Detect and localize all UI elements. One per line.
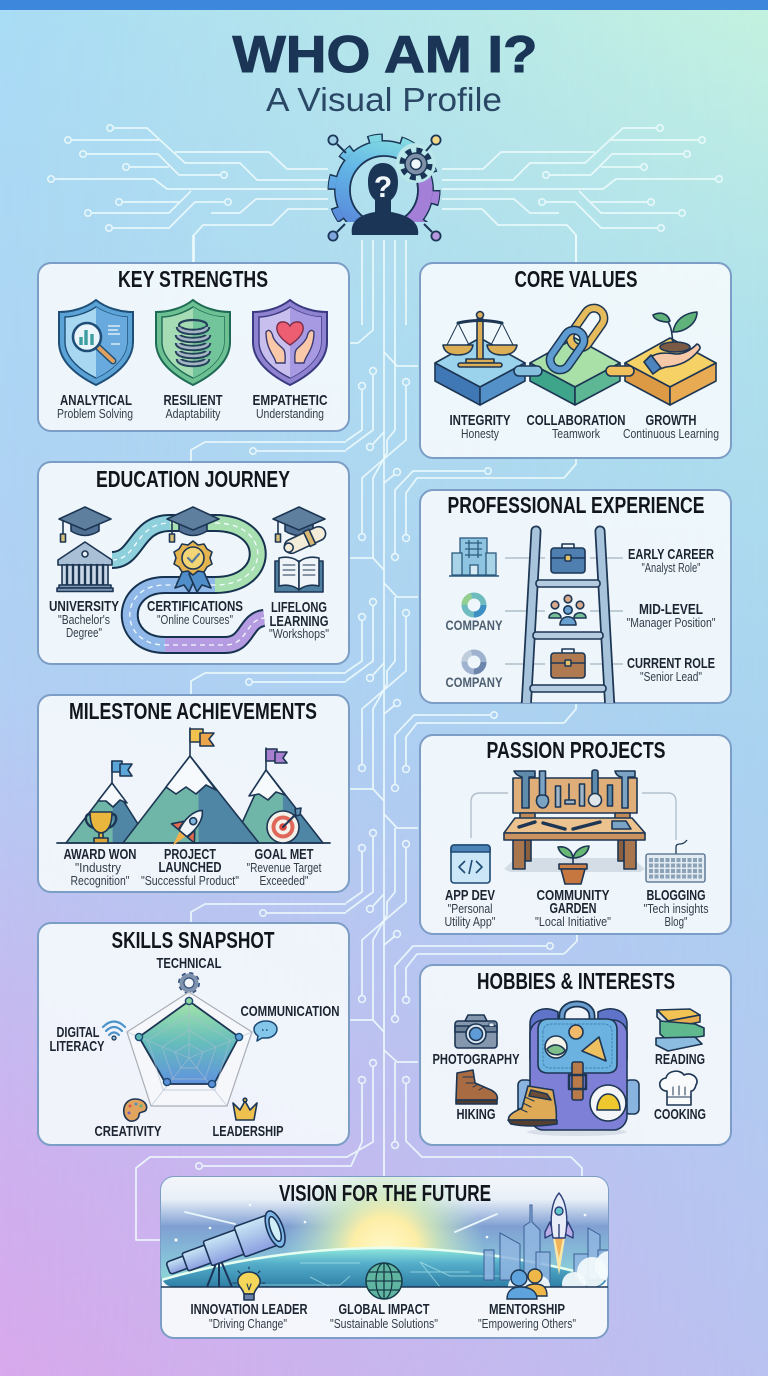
label: mentorship: "Empowering Others" <box>478 1316 576 1331</box>
label: early career: EARLY CAREER <box>628 546 714 563</box>
icon: scales <box>443 312 517 367</box>
icon: chain links <box>546 304 608 374</box>
label: early career <box>628 546 714 575</box>
icon: brown briefcase <box>551 649 585 678</box>
icon: hand with seedling <box>644 312 700 374</box>
label: university: "Bachelor's <box>58 612 110 627</box>
label: hiking: HIKING <box>456 1106 496 1123</box>
icon: target <box>267 808 301 843</box>
icon: books <box>656 1009 704 1051</box>
panel: hobbies and interests <box>420 965 731 1145</box>
label: digital literacy: LITERACY <box>50 1038 104 1055</box>
label: analytical <box>57 392 133 421</box>
icon: palette <box>124 1099 147 1121</box>
icon: globe <box>366 1263 402 1299</box>
icon: keyboard <box>646 840 705 882</box>
label: award won <box>64 846 136 888</box>
heading: key strengths: KEY STRENGTHS <box>118 266 268 292</box>
heading: passion projects: PASSION PROJECTS <box>486 737 666 763</box>
icon: potted plant <box>558 846 589 884</box>
label: integrity: INTEGRITY <box>450 412 510 429</box>
label: mid-level: MID-LEVEL <box>639 601 703 618</box>
label: leadership: LEADERSHIP <box>212 1123 284 1140</box>
label: integrity <box>450 412 510 441</box>
icon: gear <box>180 974 198 992</box>
icon: puzzle tiles <box>435 338 716 405</box>
illustration: horizon scene <box>161 1177 608 1286</box>
label: blogging: "Tech insights <box>644 901 709 916</box>
label: app dev <box>444 887 496 929</box>
label: project launched <box>141 846 239 888</box>
subtitle: A Visual Profile <box>266 81 502 118</box>
label: communication: COMMUNICATION <box>240 1003 340 1020</box>
label: current role: CURRENT ROLE <box>627 655 715 672</box>
icon: rocket <box>161 801 214 855</box>
label: resilient <box>164 392 222 421</box>
label: innovation leader: INNOVATION LEADER <box>190 1301 308 1318</box>
icon: hiking boot <box>456 1070 497 1104</box>
label: company 2: COMPANY <box>446 674 503 690</box>
panel: vision for the future <box>160 1176 609 1339</box>
label: growth: GROWTH <box>646 412 696 429</box>
label: reading: READING <box>655 1051 705 1068</box>
icon: chef hat <box>660 1071 697 1105</box>
label: mentorship: MENTORSHIP <box>489 1301 565 1318</box>
label: blogging: Blog" <box>664 914 688 929</box>
label: empathetic: Understanding <box>256 406 324 421</box>
label: mentorship <box>478 1301 576 1331</box>
label: early career: "Analyst Role" <box>642 560 701 575</box>
label: lifelong learning: LEARNING <box>270 613 328 630</box>
label: mid-level <box>626 601 716 630</box>
label: community garden: COMMUNITY <box>536 887 610 904</box>
label: creativity: CREATIVITY <box>94 1123 162 1140</box>
label: innovation leader <box>190 1301 308 1331</box>
icon: backpack <box>518 1004 639 1136</box>
label: university: Degree" <box>66 625 102 640</box>
icon: graduation cap 2 <box>167 507 219 542</box>
label: university: UNIVERSITY <box>49 598 119 615</box>
label: goal met: "Revenue Target <box>246 860 322 875</box>
icon: graduation cap 3 <box>273 507 325 542</box>
heading: hobbies and interests: HOBBIES & INTERESTS <box>477 968 675 994</box>
icon: yellow boot <box>508 1086 557 1126</box>
icon: lightbulb <box>233 1267 265 1300</box>
icon: wifi <box>103 1022 125 1040</box>
label: cooking: COOKING <box>654 1106 706 1123</box>
panel: education journey <box>38 462 349 664</box>
label: empathetic: EMPATHETIC <box>252 392 328 409</box>
label: certifications: CERTIFICATIONS <box>147 598 243 615</box>
icon: office building <box>449 538 499 576</box>
icon: certification badge <box>174 541 212 592</box>
panel: professional experience <box>420 490 731 710</box>
label: technical: TECHNICAL <box>156 955 222 972</box>
label: analytical: ANALYTICAL <box>60 392 132 409</box>
label: blogging <box>644 887 709 929</box>
label: project launched: "Successful Product" <box>141 873 239 888</box>
label: app dev: Utility App" <box>444 914 496 929</box>
label: certifications: "Online Courses" <box>157 612 233 627</box>
label: global impact <box>330 1301 438 1331</box>
icon: workbench <box>504 770 645 872</box>
label: lifelong learning: LIFELONG <box>271 599 327 616</box>
heading: skills snapshot: SKILLS SNAPSHOT <box>112 927 274 953</box>
label: resilient: RESILIENT <box>164 392 222 409</box>
label: empathetic <box>252 392 328 421</box>
label: global impact: GLOBAL IMPACT <box>338 1301 430 1318</box>
panel: milestone achievements <box>38 695 349 892</box>
label: growth <box>623 412 719 441</box>
icon: company logo 1 <box>464 596 484 614</box>
label: collaboration: COLLABORATION <box>526 412 626 429</box>
label: digital literacy: DIGITAL <box>56 1024 100 1041</box>
icon: team <box>549 595 586 625</box>
label: community garden: "Local Initiative" <box>535 914 611 929</box>
label: innovation leader: "Driving Change" <box>209 1316 287 1331</box>
label: goal met: GOAL MET <box>254 846 314 863</box>
label: goal met <box>246 846 322 888</box>
label: growth: Continuous Learning <box>623 426 719 441</box>
icon: central gear and silhouette <box>328 135 441 242</box>
label: award won: "Industry <box>75 860 121 875</box>
city skyline <box>484 1205 610 1282</box>
icon: analytical shield <box>59 300 133 385</box>
icon: chat bubble <box>254 1021 277 1041</box>
title: WHO AM I? <box>232 26 538 84</box>
heading: core values: CORE VALUES <box>514 266 638 292</box>
top bar <box>0 0 768 10</box>
heading: education journey: EDUCATION JOURNEY <box>96 466 290 492</box>
label: app dev: "Personal <box>448 901 493 916</box>
road path <box>112 523 264 645</box>
icon: mentorship people <box>507 1269 547 1299</box>
label: resilient: Adaptability <box>166 406 221 421</box>
label: collaboration <box>526 412 626 441</box>
label: digital literacy <box>50 1024 104 1055</box>
icon: diploma scroll <box>281 523 328 557</box>
label: global impact: "Sustainable Solutions" <box>330 1316 438 1331</box>
icon: university building <box>57 542 113 592</box>
label: lifelong learning: "Workshops" <box>269 626 329 641</box>
icon: graduation cap 1 <box>59 507 111 542</box>
label: photography: PHOTOGRAPHY <box>432 1051 520 1068</box>
label: current role <box>627 655 715 684</box>
icon: open book <box>275 557 323 592</box>
label: blogging: BLOGGING <box>646 887 706 904</box>
label: certifications <box>147 598 243 627</box>
panel: key strengths <box>38 263 349 431</box>
panel: passion projects <box>420 735 731 934</box>
label: mid-level: "Manager Position" <box>626 615 716 630</box>
heading: vision for the future: VISION FOR THE FUTURE <box>279 1180 491 1206</box>
icon: mountains with flags <box>57 728 330 843</box>
icon: trophy <box>86 812 116 843</box>
label: goal met: Exceeded" <box>260 873 309 888</box>
icon: blue briefcase <box>551 544 585 573</box>
heading: milestone achievements: MILESTONE ACHIEVEMENTS <box>69 698 317 724</box>
icon: telescope <box>162 1208 289 1287</box>
label: collaboration: Teamwork <box>552 426 600 441</box>
clouds <box>508 1251 608 1286</box>
label: community garden: GARDEN <box>550 900 596 917</box>
icon: crown <box>233 1098 257 1120</box>
panel: core values <box>420 263 731 458</box>
label: app dev: APP DEV <box>445 887 495 904</box>
icon: company logo 2 <box>464 652 484 672</box>
icon: central gear and silhouette: ? <box>374 171 392 204</box>
label: lifelong learning <box>269 599 329 641</box>
label: analytical: Problem Solving <box>57 406 133 421</box>
icon: empathetic shield <box>253 300 327 385</box>
rocket <box>545 1193 573 1238</box>
icon: ladder <box>526 531 610 710</box>
label: project launched: PROJECT <box>164 846 216 863</box>
icon: resilient shield <box>156 300 230 385</box>
flame <box>553 1238 565 1275</box>
label: community garden <box>535 887 611 929</box>
label: award won: Recognition" <box>70 873 130 888</box>
label: university <box>49 598 119 640</box>
label: integrity: Honesty <box>461 426 499 441</box>
label: current role: "Senior Lead" <box>640 669 702 684</box>
icon: camera <box>455 1015 497 1048</box>
label: award won: AWARD WON <box>64 846 136 863</box>
label: company 1: COMPANY <box>446 617 503 633</box>
radar chart <box>127 992 252 1106</box>
panel: skills snapshot <box>38 923 349 1145</box>
label: project launched: LAUNCHED <box>158 859 222 876</box>
icon: app window <box>451 845 490 883</box>
